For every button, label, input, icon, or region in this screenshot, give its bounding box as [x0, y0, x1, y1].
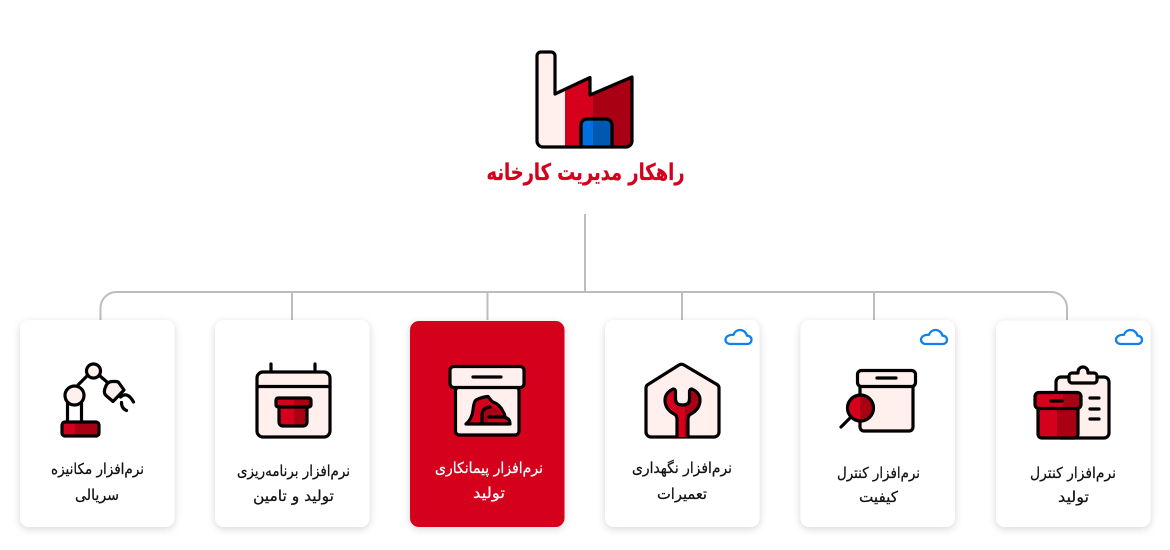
icon: clipboard and box	[1035, 367, 1109, 438]
icon: cloud	[1116, 330, 1142, 344]
label line 1: نرم‌افزار کنترل	[837, 464, 920, 482]
panel: production planning and supply software	[215, 320, 370, 527]
label line 1: نرم‌افزار مکانیزه	[51, 460, 144, 478]
icon: factory	[537, 52, 632, 147]
label line 1: نرم‌افزار کنترل	[1030, 464, 1116, 482]
label line 2: تولید	[473, 484, 505, 502]
panel: production control software	[996, 320, 1150, 527]
title: راهکار مدیریت کارخانه	[486, 160, 684, 186]
label line 1: نرم‌افزار برنامه‌ریزی	[237, 462, 350, 480]
label line 2: سریالی	[75, 486, 119, 504]
panel: maintenance software	[605, 320, 760, 527]
panel: quality control software	[800, 320, 955, 527]
connector tree	[100, 214, 1067, 320]
label line 2: تولید و تامین	[253, 487, 334, 505]
label line 2: تولید	[1058, 488, 1089, 506]
panel: serial mechanization software	[20, 320, 174, 527]
icon: robot arm	[62, 364, 134, 436]
label line 1: نرم‌افزار پیمانکاری	[435, 459, 543, 478]
icon: cloud	[726, 330, 752, 344]
icon: cloud	[921, 330, 947, 344]
icon: house with wrench	[646, 364, 719, 437]
icon: box with helmet	[450, 366, 524, 435]
icon: calendar box	[257, 364, 330, 437]
panel: production contracting software (highlighted)	[410, 321, 564, 527]
label line 2: کیفیت	[859, 488, 899, 506]
label line 2: تعمیرات	[657, 485, 707, 503]
label line 1: نرم‌افزار نگهداری	[632, 459, 732, 477]
icon: box with magnifier	[841, 370, 916, 431]
